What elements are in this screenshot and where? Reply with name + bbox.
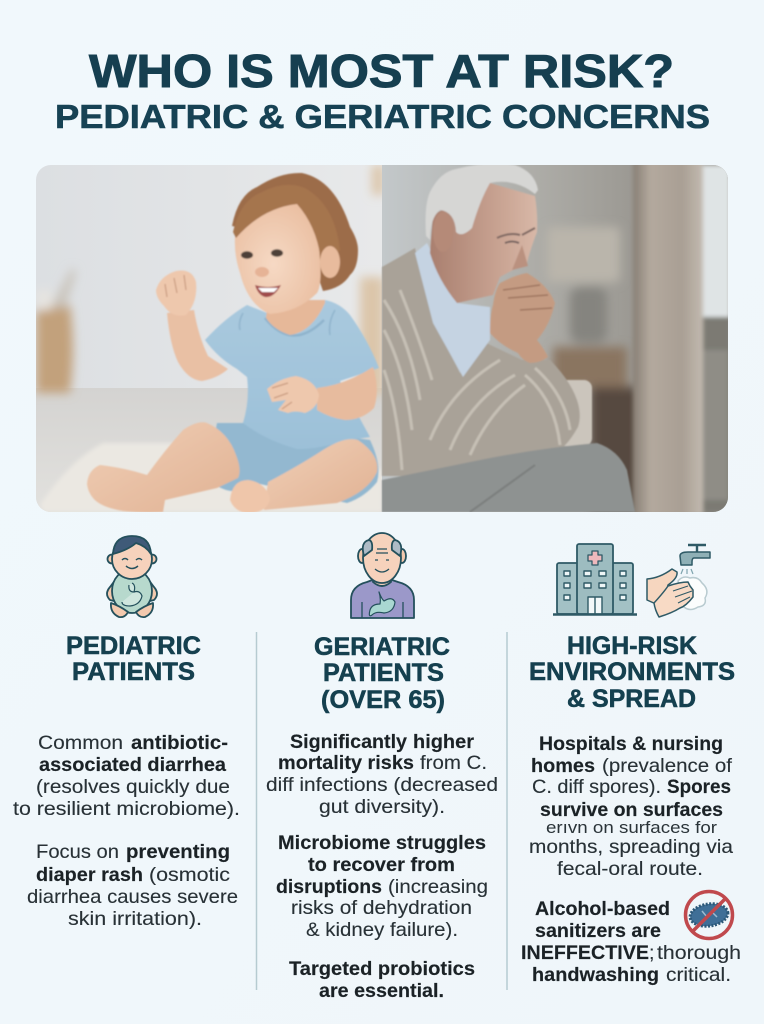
text block: pediatric details: skin irritation). <box>68 908 202 930</box>
hair back <box>232 173 358 291</box>
text block: pediatric details: associated diarrhea <box>39 754 226 776</box>
legs <box>264 439 377 510</box>
icon: baby with stomach <box>107 536 157 617</box>
text block: geriatric details: disruptions <box>276 876 382 898</box>
text block: geriatric details: risks of dehydration <box>291 897 472 919</box>
text block: geriatric details: gut diversity). <box>319 796 445 818</box>
icon: hospital <box>553 544 637 614</box>
photo: smiling toddler sitting on rug <box>36 165 384 513</box>
clasped hands <box>490 273 555 363</box>
heading: geriatric patients: GERIATRIC <box>314 633 450 661</box>
icon: washing hands under a tap <box>647 545 710 617</box>
text block: geriatric details: higher <box>413 731 474 753</box>
title <box>55 45 710 136</box>
text block: pediatric details <box>13 732 240 930</box>
text block: environments and spread: survive on surfaces <box>540 799 723 821</box>
shirt <box>205 300 379 449</box>
text block: pediatric details: Common <box>38 732 123 754</box>
heading: high-risk environments <box>529 632 735 713</box>
shirt collar <box>415 243 490 377</box>
heading: pediatric patients: PATIENTS <box>72 658 195 686</box>
text block: environments and spread: Spores <box>667 776 731 798</box>
icon: crossed-out bacterium <box>686 892 732 938</box>
far arm <box>167 310 228 381</box>
text block: pediatric details: preventing <box>126 841 230 863</box>
sweater <box>382 248 580 476</box>
text block: pediatric details: diarrhea causes severe <box>27 886 238 908</box>
near arm <box>317 367 377 420</box>
text block: pediatric details: to resilient microbiome). <box>13 798 240 820</box>
text block: environments and spread: (prevalence of <box>602 755 733 777</box>
text block: environments and spread: homes <box>531 755 595 777</box>
text block: environments and spread: sanitizers are <box>535 920 661 942</box>
text block: pediatric details: Focus on <box>36 841 119 863</box>
neck <box>266 300 325 335</box>
text block: environments and spread: INEFFECTIVE <box>521 942 649 964</box>
title: WHO IS MOST AT RISK? <box>89 45 674 97</box>
shorts <box>207 423 378 503</box>
heading: geriatric patients: (OVER 65) <box>321 686 445 714</box>
heading: high-risk environments: ENVIRONMENTS <box>529 658 735 686</box>
text block: pediatric details: (resolves quickly due <box>36 776 230 798</box>
text block: geriatric details <box>266 731 498 1002</box>
text block: geriatric details: to recover from <box>308 854 455 876</box>
text block: pediatric details: diaper rash <box>36 864 143 886</box>
text block: environments and spread: Hospitals & nursing <box>539 733 723 755</box>
photo: older man in thought <box>382 160 730 515</box>
text block: geriatric details: Targeted probiotics <box>289 958 475 980</box>
text block: environments and spread: C. diff spores). <box>532 776 661 798</box>
text block: geriatric details: Significantly <box>290 731 407 753</box>
text block: environments and spread <box>521 733 741 986</box>
text block: environments and spread: months, spreading via <box>529 836 733 858</box>
text block: geriatric details: from C. <box>420 752 487 774</box>
text block: environments and spread: critical. <box>666 964 731 986</box>
text block: pediatric details: (osmotic <box>149 864 230 886</box>
heading: high-risk environments: HIGH-RISK <box>567 632 697 660</box>
face <box>235 203 321 314</box>
heading: geriatric patients <box>314 633 450 714</box>
text block: geriatric details: mortality risks <box>278 752 414 774</box>
head <box>430 183 537 303</box>
trousers <box>382 443 635 512</box>
text block: geriatric details: are essential. <box>319 980 444 1002</box>
text block: geriatric details: (increasing <box>388 876 488 898</box>
hair <box>426 163 538 240</box>
heading: geriatric patients: PATIENTS <box>323 659 444 687</box>
icon: older patient with stomach <box>351 533 414 618</box>
text block: environments and spread: handwashing <box>532 964 659 986</box>
title: PEDIATRIC & GERIATRIC CONCERNS <box>55 99 710 136</box>
heading: pediatric patients <box>66 632 201 686</box>
heading: high-risk environments: & SPREAD <box>567 685 696 713</box>
heading: pediatric patients: PEDIATRIC <box>66 632 201 660</box>
text block: geriatric details: diff infections (decreased <box>266 774 498 796</box>
text block: environments and spread: ; <box>649 942 654 964</box>
text block: environments and spread: Alcohol-based <box>535 898 670 920</box>
text block: geriatric details: & kidney failure). <box>306 919 458 941</box>
text block: geriatric details: Microbiome struggles <box>278 832 486 854</box>
photo panel: toddler and older man <box>36 160 730 515</box>
text block: environments and spread: erıvn on surfaces for <box>546 819 718 837</box>
text block: environments and spread: fecal-oral route. <box>557 858 703 880</box>
text block: pediatric details: antibiotic- <box>131 732 228 754</box>
column dividers <box>256 632 507 990</box>
text block: environments and spread: thorough <box>657 942 741 964</box>
